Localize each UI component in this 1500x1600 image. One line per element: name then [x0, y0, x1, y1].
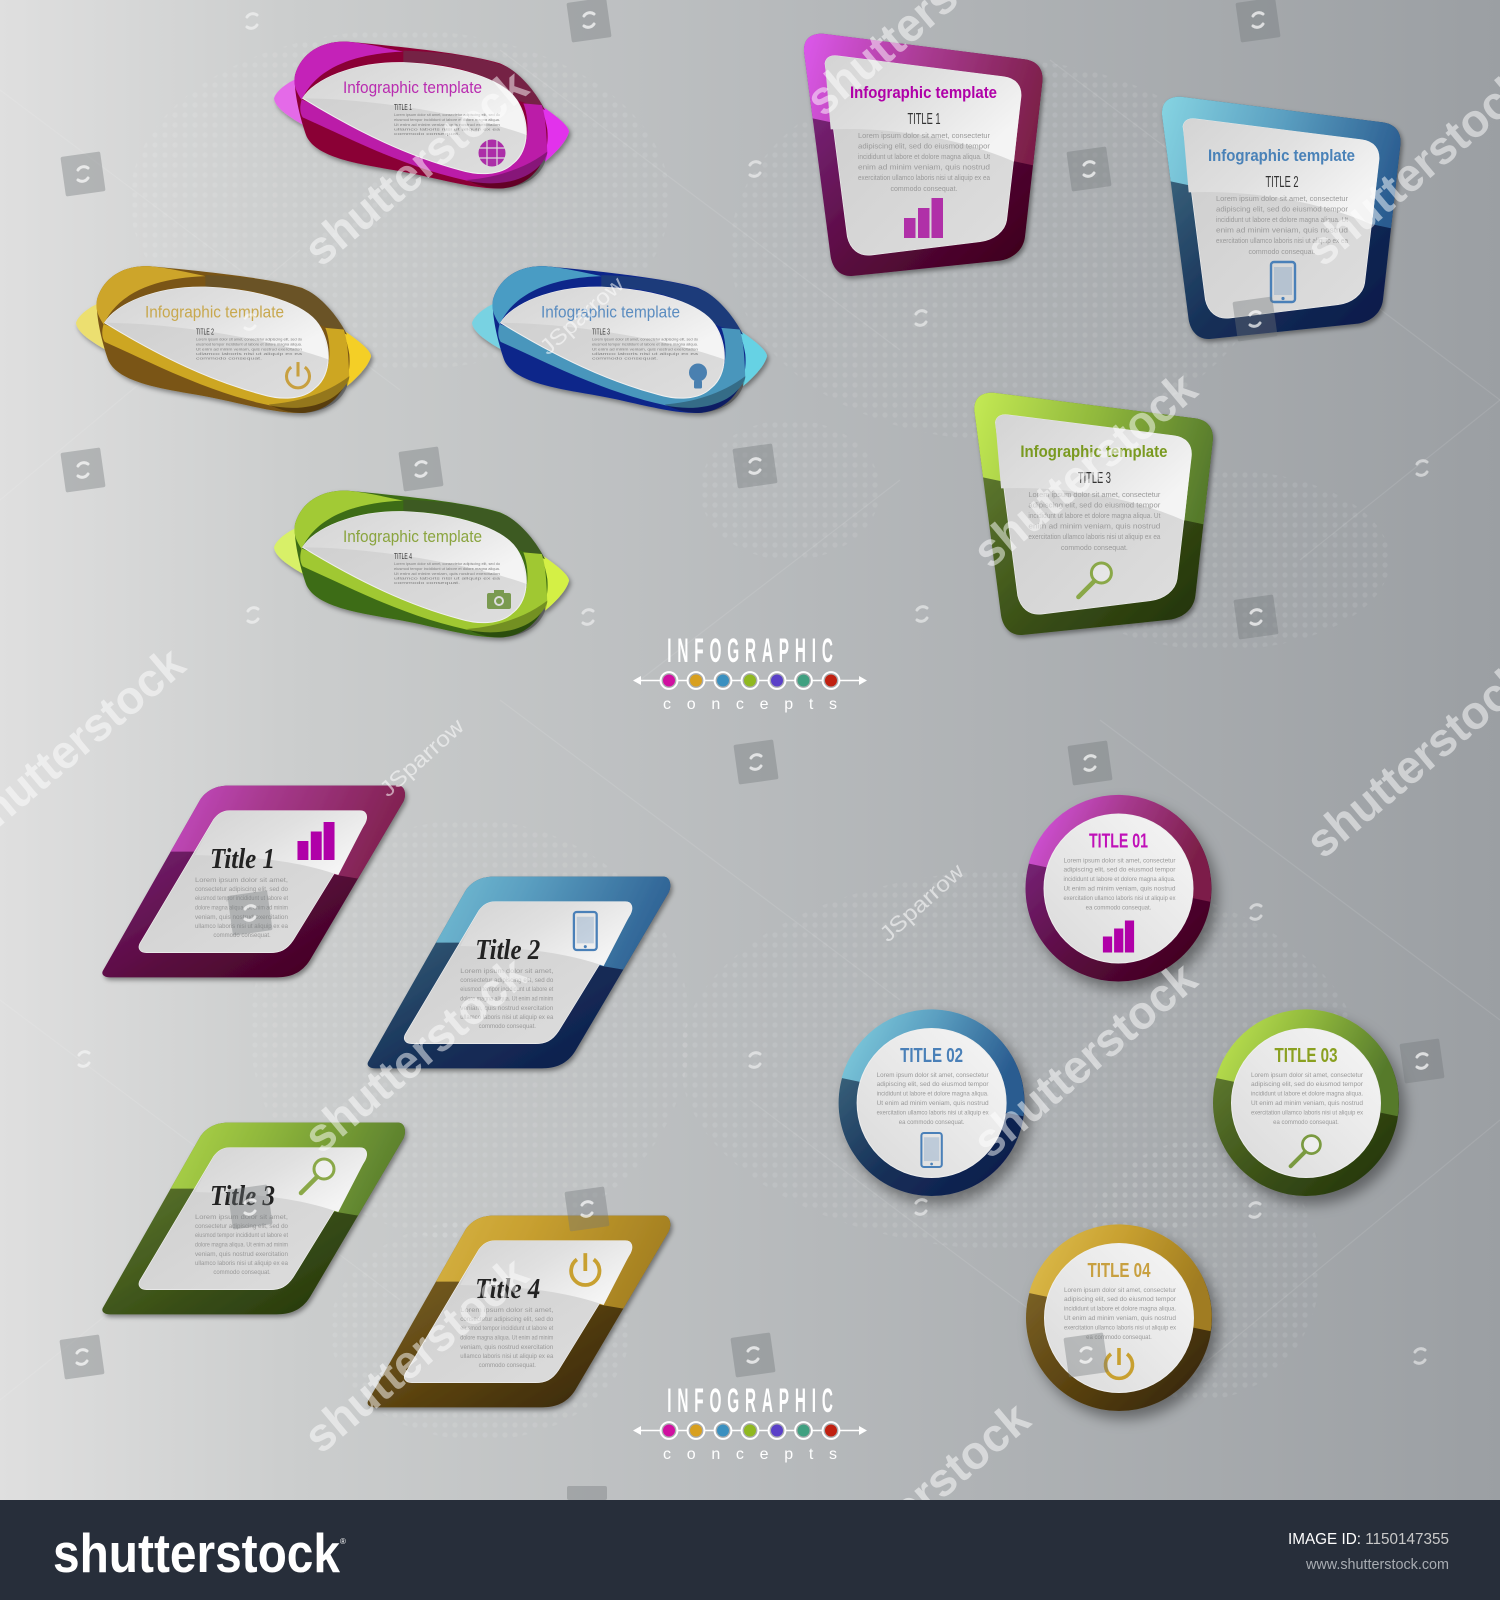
logo subheading: concepts: [663, 696, 837, 713]
blob card 1: [274, 42, 569, 188]
parallelogram 3 text: eiusmod tempor incididunt ut labore et: [195, 1233, 288, 1239]
parallelogram 1 text: veniam, quis nostrud exercitation: [195, 915, 288, 921]
parallelogram 3 title: Title 3: [210, 1180, 275, 1212]
icon: globe: [478, 140, 506, 166]
parallelogram 3 text: commodo consequat.: [213, 1270, 271, 1276]
blob 4 subtitle: TITLE 4: [394, 551, 412, 561]
watermark swirls: [77, 13, 1427, 1364]
blob 4 text: ullamco laboris nisi ut aliquip ex ea: [394, 576, 501, 580]
parallelogram 1 title: Title 1: [210, 843, 275, 875]
watermark text: shutterstock: [962, 950, 1207, 1168]
watermark text: JSparrow: [375, 713, 469, 802]
circle 01 text: ea commodo consequat.: [1086, 906, 1152, 912]
blob 2 text: commodo consequat.: [196, 356, 262, 360]
circle 02 text: [877, 1073, 989, 1126]
logo line with dots: [633, 1422, 867, 1439]
watermark text: shutterstock: [293, 1245, 538, 1463]
icon: power: [1106, 1348, 1132, 1378]
parallelogram 4 text: dolore magna aliqua. Ut enim ad minim: [460, 1336, 553, 1342]
parallelogram 4 title: Title 4: [475, 1273, 540, 1305]
trapezoid 3 text: exercitation ullamco laboris nisi ut aliquip ex ea: [1028, 534, 1160, 541]
blob 1 title: Infographic template: [343, 78, 482, 97]
parallelogram 1 text: dolore magna aliqua. Ut enim ad minim: [195, 906, 288, 912]
circle card 03: [1213, 1009, 1399, 1196]
circle 01 text: [1064, 858, 1176, 912]
watermark text: shutterstock: [293, 945, 538, 1163]
circle 03 text: Ut enim ad minim veniam, quis nostrud: [1251, 1101, 1363, 1107]
icon: power: [287, 362, 309, 388]
watermark text: shutterstock: [293, 58, 538, 276]
footer website: www.shutterstock.com: [1305, 1556, 1449, 1573]
parallelogram 4 text: ullamco laboris nisi ut aliquip ex ea: [460, 1354, 554, 1360]
trapezoid 3 text: Lorem ipsum dolor sit amet, consectetur: [1028, 492, 1161, 499]
blob 4 text: [394, 561, 501, 585]
dotted world maps: [130, 30, 1390, 1440]
circle 04 text: Ut enim ad minim veniam, quis nostrud: [1064, 1316, 1176, 1322]
parallelogram 1 text: eiusmod tempor incididunt ut labore et: [195, 896, 288, 902]
trapezoid 1 text: Lorem ipsum dolor sit amet, consectetur: [858, 133, 991, 140]
icon: bar chart: [297, 822, 335, 860]
trapezoid 1 text: exercitation ullamco laboris nisi ut aliquip ex ea: [858, 175, 990, 182]
circle 02 text: exercitation ullamco laboris nisi ut aliquip ex: [877, 1110, 989, 1116]
parallelogram 2 title: Title 2: [475, 934, 540, 966]
blob 4 text: commodo consequat.: [394, 580, 460, 585]
blob 4 text: Ut enim ad minim veniam, quis nostrud exercitation: [394, 571, 500, 576]
parallelogram 2 text: consectetur adipiscing elit, sed do: [460, 978, 554, 984]
circle 02 text: Lorem ipsum dolor sit amet, consectetur: [877, 1073, 989, 1079]
icon: power: [571, 1253, 599, 1285]
trapezoid 3 text: incididunt ut labore et dolore magna aliqua. Ut: [1028, 513, 1160, 520]
trapezoid card 1: [804, 34, 1042, 276]
infographic logo bottom: [633, 1381, 867, 1463]
blob 3 subtitle: TITLE 3: [592, 326, 610, 336]
icon: phone: [921, 1133, 942, 1167]
blob 1 text: Ut enim ad minim veniam, quis nostrud exercitation: [394, 122, 500, 127]
trapezoid 3 text: adipiscing elit, sed do eiusmod tempor: [1028, 502, 1161, 510]
trapezoid 2 title: Infographic template: [1208, 146, 1355, 165]
parallelogram 4 text: consectetur adipiscing elit, sed do: [460, 1317, 554, 1323]
blob 2 title: Infographic template: [145, 302, 284, 322]
parallelogram 4 text: veniam, quis nostrud exercitation: [460, 1345, 553, 1351]
circle 04 text: [1064, 1288, 1176, 1341]
blob 1 text: eiusmod tempor incididunt ut labore et dolore magna aliqua.: [394, 117, 500, 122]
parallelogram 3 text: dolore magna aliqua. Ut enim ad minim: [195, 1242, 288, 1248]
blob 3 text: Lorem ipsum dolor sit amet, consectetur adipiscing elit, sed do: [592, 336, 699, 342]
circle 02 text: Ut enim ad minim veniam, quis nostrud: [877, 1101, 989, 1107]
trapezoid 1 text: adipiscing elit, sed do eiusmod tempor: [858, 144, 991, 150]
blob 4 title: Infographic template: [343, 527, 482, 546]
circle 01 text: exercitation ullamco laboris nisi ut aliquip ex: [1064, 896, 1176, 902]
trapezoid 1 text: [858, 133, 991, 193]
blob 2 text: Ut enim ad minim veniam, quis nostrud exercitation: [196, 346, 302, 352]
trapezoid 1 text: commodo consequat.: [891, 186, 958, 193]
parallelogram card 4: [368, 1216, 670, 1407]
logo heading: INFOGRAPHIC: [667, 1381, 839, 1420]
parallelogram 4 text: eiusmod tempor incididunt ut labore et: [460, 1326, 554, 1332]
trapezoid 2 text: commodo consequat.: [1249, 249, 1316, 256]
icon: light bulb: [689, 364, 707, 388]
blob 1 text: Lorem ipsum dolor sit amet, consectetur adipiscing elit, sed do: [394, 112, 501, 117]
parallelogram 4 text: Lorem ipsum dolor sit amet,: [460, 1308, 554, 1314]
logo heading: INFOGRAPHIC: [667, 631, 839, 670]
circle 04 text: exercitation ullamco laboris nisi ut aliquip ex: [1064, 1326, 1176, 1332]
icon: magnifier: [1078, 563, 1111, 597]
trapezoid 3 text: commodo consequat.: [1061, 545, 1128, 552]
parallelogram 3 text: consectetur adipiscing elit, sed do: [195, 1224, 289, 1230]
watermark text: JSparrow: [875, 858, 969, 947]
watermark text: JSparrow: [535, 271, 629, 360]
blob 4 text: eiusmod tempor incididunt ut labore et dolore magna aliqua.: [394, 566, 500, 571]
blob 2 text: Lorem ipsum dolor sit amet, consectetur adipiscing elit, sed do: [196, 336, 303, 342]
circle 03 text: exercitation ullamco laboris nisi ut aliquip ex: [1251, 1110, 1363, 1116]
circle 01 text: Lorem ipsum dolor sit amet, consectetur: [1064, 858, 1176, 864]
circle card 01: [1026, 795, 1212, 982]
parallelogram 3 text: ullamco laboris nisi ut aliquip ex ea: [195, 1261, 289, 1267]
blob 2 text: [196, 336, 303, 360]
parallelogram 1 text: commodo consequat.: [213, 933, 271, 939]
circle 02 title: TITLE 02: [900, 1045, 963, 1067]
icon: bar chart: [1103, 920, 1134, 952]
circle 02 text: adipiscing elit, sed do eiusmod tempor: [877, 1082, 989, 1088]
trapezoid 3 text: enim ad minim veniam, quis nostrud: [1028, 524, 1161, 530]
icon: magnifier: [301, 1159, 334, 1193]
parallelogram 2 text: ullamco laboris nisi ut aliquip ex ea: [460, 1015, 554, 1021]
blob card 4: [274, 491, 569, 637]
blob 2 subtitle: TITLE 2: [196, 326, 214, 336]
parallelogram 1 text: [195, 878, 289, 939]
trapezoid 2 text: incididunt ut labore et dolore magna aliqua. Ut: [1216, 217, 1348, 224]
blob card 2: [76, 266, 371, 413]
trapezoid 1 subtitle: TITLE 1: [908, 111, 941, 128]
circle 03 title: TITLE 03: [1274, 1045, 1338, 1067]
trapezoid 1 text: incididunt ut labore et dolore magna aliqua. Ut: [858, 154, 990, 161]
circle 01 title: TITLE 01: [1089, 830, 1148, 852]
parallelogram card 2: [368, 877, 670, 1068]
blob card 3: [472, 266, 767, 413]
blob 4 text: Lorem ipsum dolor sit amet, consectetur adipiscing elit, sed do: [394, 561, 501, 566]
parallelogram 2 text: commodo consequat.: [479, 1024, 536, 1030]
parallelogram 2 text: [460, 969, 554, 1030]
circle 03 text: adipiscing elit, sed do eiusmod tempor: [1251, 1082, 1363, 1088]
trapezoid 1 text: enim ad minim veniam, quis nostrud: [858, 164, 990, 172]
circle 03 text: ea commodo consequat.: [1273, 1120, 1339, 1126]
trapezoid 2 text: Lorem ipsum dolor sit amet, consectetur: [1216, 196, 1349, 203]
infographic logo top: [633, 631, 867, 713]
trapezoid 2 text: [1216, 196, 1349, 256]
circle 01 text: adipiscing elit, sed do eiusmod tempor: [1064, 868, 1176, 874]
circle 02 text: incididunt ut labore et dolore magna aliqua.: [877, 1092, 989, 1098]
logo line with dots: [633, 672, 867, 689]
blob 3 text: Ut enim ad minim veniam, quis nostrud exercitation: [592, 346, 698, 352]
footer bar: [0, 1500, 1500, 1600]
circle 04 text: adipiscing elit, sed do eiusmod tempor: [1064, 1297, 1176, 1303]
trapezoid 2 text: enim ad minim veniam, quis nostrud: [1216, 228, 1348, 234]
blob 3 text: [592, 336, 699, 360]
parallelogram card 1: [102, 786, 405, 977]
trapezoid 3 subtitle: TITLE 3: [1078, 470, 1111, 487]
icon: bar chart: [904, 198, 943, 238]
parallelogram 3 text: [195, 1215, 289, 1276]
trapezoid 2 text: exercitation ullamco laboris nisi ut aliquip ex ea: [1216, 238, 1348, 245]
parallelogram 4 text: [460, 1308, 554, 1369]
icon: phone: [574, 912, 597, 950]
circle 04 text: ea commodo consequat.: [1086, 1335, 1152, 1341]
circle 04 title: TITLE 04: [1088, 1260, 1151, 1282]
watermark text: shutterstock: [962, 360, 1207, 578]
parallelogram 2 text: Lorem ipsum dolor sit amet,: [460, 969, 554, 975]
trapezoid 1 title: Infographic template: [850, 83, 997, 102]
parallelogram 1 text: consectetur adipiscing elit, sed do: [195, 887, 289, 893]
trapezoid card 2: [1162, 97, 1400, 339]
blob 2 text: ullamco laboris nisi ut aliquip ex ea: [196, 351, 303, 356]
circle 03 text: Lorem ipsum dolor sit amet, consectetur: [1251, 1073, 1363, 1079]
circle 01 text: Ut enim ad minim veniam, quis nostrud: [1064, 886, 1175, 892]
blob 3 text: ullamco laboris nisi ut aliquip ex ea: [592, 351, 699, 356]
blob 1 subtitle: TITLE 1: [394, 102, 412, 112]
parallelogram 1 text: Lorem ipsum dolor sit amet,: [195, 878, 288, 884]
circle 01 text: incididunt ut labore et dolore magna aliqua.: [1064, 877, 1176, 883]
circle 03 text: [1251, 1073, 1363, 1126]
blob 2 text: eiusmod tempor incididunt ut labore et dolore magna aliqua.: [196, 342, 302, 346]
logo subheading: concepts: [663, 1446, 837, 1463]
parallelogram card 3: [102, 1123, 405, 1314]
icon: camera: [487, 590, 511, 609]
footer logo: shutterstock: [53, 1522, 340, 1584]
parallelogram 2 text: veniam, quis nostrud exercitation: [460, 1006, 553, 1012]
footer registered mark: ®: [340, 1537, 346, 1546]
blob 1 text: commodo consequat.: [394, 131, 460, 136]
circle 04 text: Lorem ipsum dolor sit amet, consectetur: [1064, 1288, 1176, 1294]
circle card 02: [839, 1009, 1025, 1196]
parallelogram 1 text: ullamco laboris nisi ut aliquip ex ea: [195, 924, 289, 930]
circle 02 text: ea commodo consequat.: [899, 1120, 965, 1126]
parallelogram 2 text: dolore magna aliqua. Ut enim ad minim: [460, 996, 553, 1002]
parallelogram 3 text: Lorem ipsum dolor sit amet,: [195, 1215, 288, 1221]
trapezoid 2 subtitle: TITLE 2: [1266, 174, 1299, 191]
parallelogram 4 text: commodo consequat.: [479, 1363, 536, 1369]
blob 1 text: [394, 112, 501, 136]
circle 04 text: incididunt ut labore et dolore magna aliqua.: [1064, 1306, 1176, 1312]
parallelogram 3 text: veniam, quis nostrud exercitation: [195, 1252, 288, 1258]
footer image id: IMAGE ID: 1150147355: [1288, 1531, 1449, 1548]
trapezoid 3 title: Infographic template: [1020, 442, 1167, 461]
blob 3 title: Infographic template: [541, 302, 680, 322]
icon: magnifier: [1291, 1136, 1320, 1166]
trapezoid 3 text: [1028, 492, 1161, 552]
icon: phone: [1271, 262, 1295, 302]
circle 03 text: incididunt ut labore et dolore magna aliqua.: [1251, 1092, 1363, 1098]
parallelogram 2 text: eiusmod tempor incididunt ut labore et: [460, 987, 554, 993]
blob 1 text: ullamco laboris nisi ut aliquip ex ea: [394, 126, 501, 132]
trapezoid 2 text: adipiscing elit, sed do eiusmod tempor: [1216, 206, 1349, 214]
blob 3 text: commodo consequat.: [592, 356, 658, 360]
trapezoid card 3: [974, 393, 1213, 635]
circle card 04: [1026, 1224, 1212, 1411]
blob 3 text: eiusmod tempor incididunt ut labore et dolore magna aliqua.: [592, 342, 698, 346]
